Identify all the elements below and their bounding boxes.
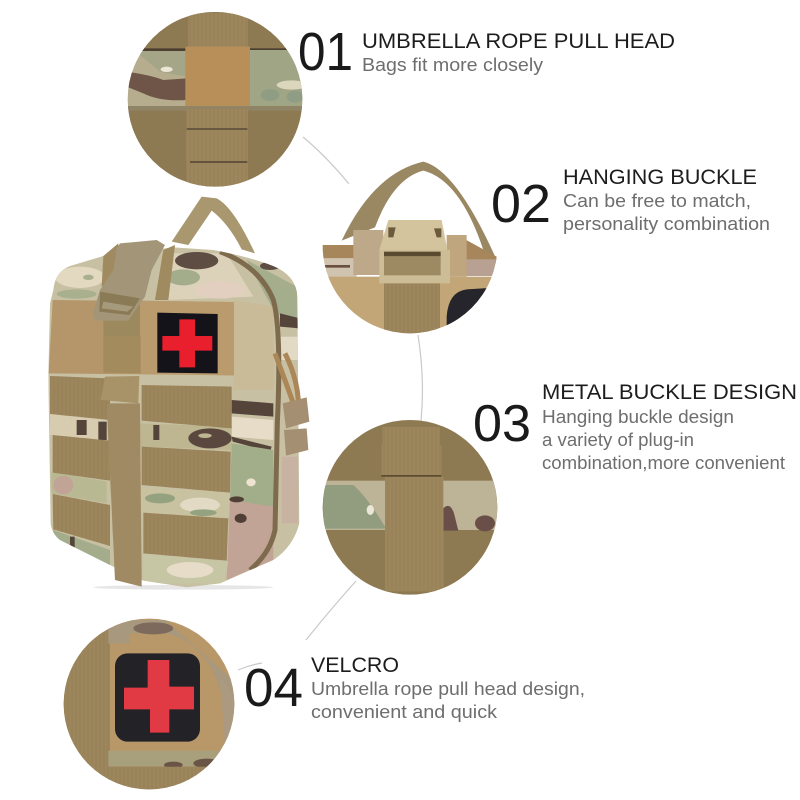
feature 04 text: convenient and quick [311,702,498,722]
upper strap [103,300,140,337]
feature 02 text: personality combination [563,214,770,234]
detail circle 4: velcro patch [60,613,240,793]
feature 01 text [298,22,675,82]
feature 01 text: Bags fit more closely [362,55,543,75]
feature 04 text: VELCRO [311,654,399,677]
feature 01 text: 01 [298,22,353,82]
feature 03 text: 03 [473,395,531,453]
feature 02 text: 02 [491,174,551,234]
handle arc [342,162,497,260]
zipper pull tabs [275,353,309,456]
feature 02 text: HANGING BUCKLE [563,166,757,189]
bag body with camouflage [48,248,300,588]
tan velcro tab [185,47,250,106]
feature 02 text: Can be free to match, [563,191,751,211]
bag shadow [93,585,273,590]
feature 04 text [244,654,585,722]
MOLLE webbing rows [50,376,232,561]
feature 04 text: Umbrella rope pull head design, [311,679,585,699]
patch [115,653,200,742]
vertical strap [107,403,142,587]
feature 03 text: combination,more convenient [542,453,785,473]
main product: camouflage medical pouch [40,190,320,590]
feature 01 text: UMBRELLA ROPE PULL HEAD [362,30,675,53]
detail circle 3: metal buckle design [320,417,500,597]
connector lines [238,137,422,670]
red cross patch [157,313,218,373]
feature 03 text: METAL BUCKLE DESIGN [542,381,797,404]
feature 03 text: Hanging buckle design [542,407,734,427]
feature 03 text [473,381,797,473]
plastic buckle [93,240,165,321]
detail circle 2: hanging buckle [320,157,500,337]
velcro panel [49,300,234,375]
zipper [220,252,279,570]
detail circle 1: umbrella rope pull head [127,10,307,190]
feature 02 text [491,166,770,234]
buckle [379,220,450,283]
carry handle [172,197,255,253]
feature 03 text: a variety of plug-in [542,430,694,450]
feature 04 text: 04 [244,658,303,718]
red cross [124,660,194,733]
strap loop [103,337,141,373]
